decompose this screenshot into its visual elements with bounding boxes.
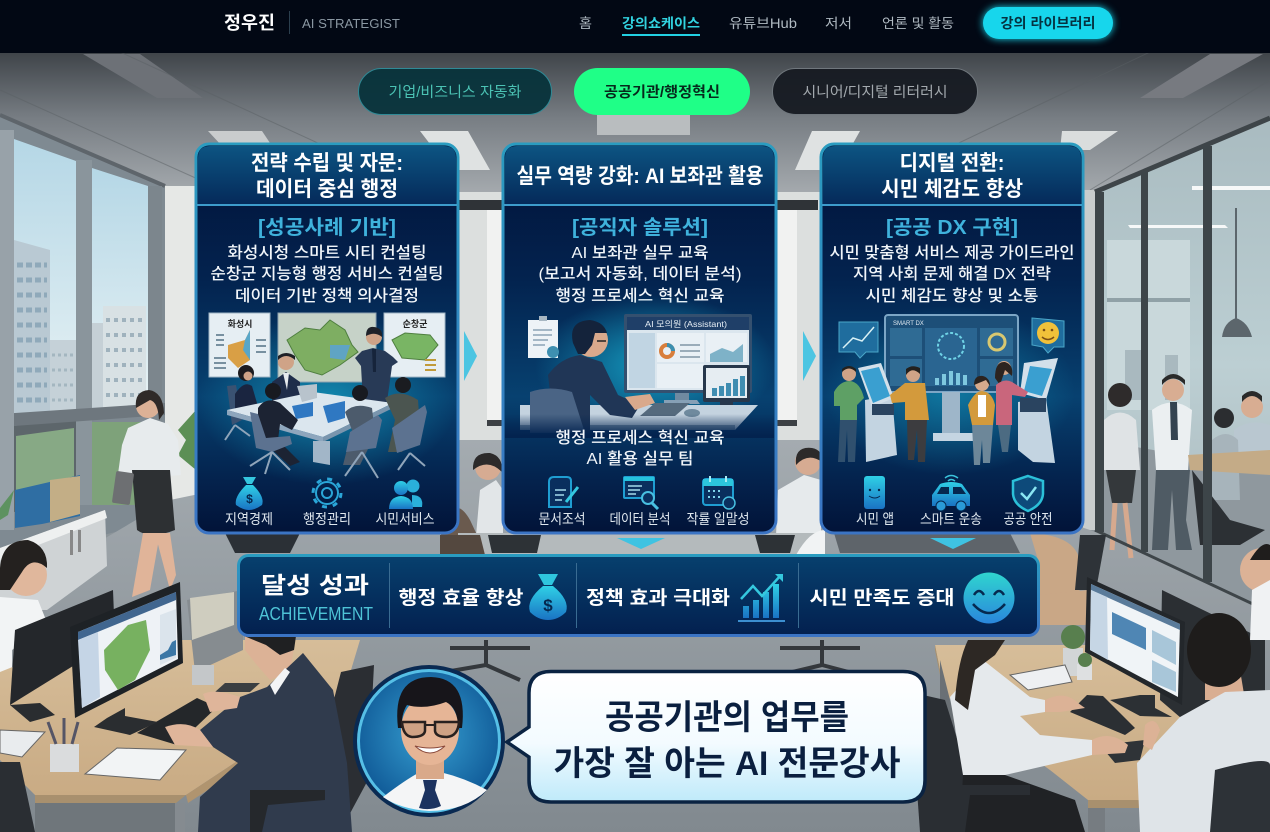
carpet floor [0,440,1270,832]
left desk [0,590,360,832]
lower caption: 행정 프로세스 혁신 교육 [556,429,724,447]
achievement: citizen satisfaction: 시민 만족도 증대 [810,587,954,609]
panel: digital transformation [821,144,1083,533]
speech bubble [507,672,925,802]
back seated people [227,353,300,425]
chair [530,388,585,433]
icon: money bag [236,477,263,510]
achievement bar [238,556,1038,636]
brand: AI STRATEGIST [302,16,400,31]
icon labels: 작률 일말성 [686,511,750,527]
icon: shield [1013,476,1043,511]
menu links: 홈 [579,16,592,31]
icon: calendar [703,476,735,509]
lower caption: AI 활용 실무 팀 [586,450,694,468]
right kiosk [1018,358,1058,463]
front seated people and chairs [225,377,427,478]
panel title: 디지털 전환: [900,152,1004,175]
panel title: 전략 수립 및 자문: [251,152,403,175]
panel bullet text: AI 보좌관 실무 교육 [572,244,708,262]
illustration: officer with AI assistant [505,295,775,436]
panel bullet text: 순창군 지능형 행정 서비스 컨설팅 [210,265,444,283]
ceiling [0,50,1270,200]
library button: 강의 라이브러리 [1000,15,1096,31]
connector arrows between panels [464,331,976,549]
achievement: efficiency: $ [543,596,553,615]
icon labels: 스마트 운송 [920,511,982,527]
back wall and projection screen [160,186,1100,530]
menu links: 언론 및 활동 [882,16,954,31]
panel bullet text [538,244,742,305]
documents [85,748,186,780]
panel bullet text: 행정 프로세스 혁신 교육 [556,287,724,305]
woman at right desk [912,640,1128,832]
right desk [935,625,1200,832]
icon: data search [624,477,658,509]
icon labels: 공공 안전 [1004,511,1052,527]
illustration: meeting room with maps [197,313,457,485]
keyboard [137,698,217,745]
icon labels: 데이터 분석 [610,511,670,527]
tab: business [358,68,552,114]
menu links: 유튜브Hub [729,16,797,31]
woman walking [112,390,181,597]
icon: citizen app [864,476,885,509]
filing cabinet [0,475,107,610]
speaker portrait [353,665,505,817]
brand: 정우진 [224,13,275,33]
achievement: policy impact: 정책 효과 극대화 [586,587,730,609]
panel bullet text [830,244,1074,305]
left kiosk [858,363,897,462]
panel bullet text: 화성시청 스마트 시티 컨설팅 [228,244,426,262]
plants [1063,648,1083,676]
tab: business: 기업/비즈니스 자동화 [388,84,522,101]
icon labels: 시민서비스 [376,511,435,527]
achievement: efficiency: 행정 효율 향상 [398,587,524,609]
smile bubble [1032,318,1064,353]
achievement: policy impact [586,574,785,622]
navigation bar [0,0,1270,53]
glasses [402,722,459,737]
menu links: 저서 [825,16,852,31]
panel bullet text [210,244,444,305]
menu links [579,16,954,36]
icon labels [538,511,750,527]
achievement heading: 달성 성과 [261,572,369,598]
panel subtitle: [공공 DX 구현] [886,216,1018,239]
panel: practical skills [503,144,776,533]
file holder [187,590,243,672]
panel title: 데이터 중심 행정 [256,178,398,201]
citizens [834,361,1028,465]
panel title: 실무 역량 강화: AI 보좌관 활용 [516,165,764,188]
keyboard and pad [1070,695,1135,735]
chair bottom-left [0,762,35,832]
standing presenter [355,327,398,402]
icon: money bag: $ [246,492,253,506]
brand [224,11,400,34]
clipboard [528,316,559,358]
menu links: 강의쇼케이스 [622,16,700,31]
left window with city view [0,115,165,560]
panel: strategy and consulting [196,144,458,533]
achievement: citizen satisfaction [810,572,1014,624]
people behind glass [1104,374,1270,558]
desk [520,405,758,430]
smile [415,746,445,753]
panel subtitle: [성공사례 기반] [258,216,396,239]
tab: senior [772,68,978,114]
man at right foreground [1137,544,1270,832]
dashboard screen [885,315,1018,392]
panel bullet text: (보고서 자동화, 데이터 분석) [538,265,742,283]
man in suit at left desk [165,636,374,832]
achievement heading: ACHIEVEMENT [259,604,373,624]
panel bullet text: 시민 체감도 향상 및 소통 [866,287,1038,305]
right glass partition [1095,118,1270,612]
keyboard and mouse [640,403,690,416]
achievement heading [259,572,373,624]
pen cup [192,665,214,685]
icon: smart car [932,476,970,511]
tab: public sector active [574,68,750,115]
main monitor [624,314,752,393]
icon: gear [313,479,341,507]
tab: public sector active: 공공기관/행정혁신 [604,84,720,101]
illustration: kiosks and dashboard [825,305,1075,475]
panel bullet text: 지역 사회 문제 해결 DX 전략 [853,265,1051,283]
icon labels [856,511,1052,527]
seated man at left [0,540,48,705]
icon labels: 지역경제 [225,511,273,527]
library button [983,7,1113,39]
officer [548,355,640,433]
achievement: efficiency [398,574,567,620]
small monitor [703,365,750,402]
panel subtitle: [공직자 솔루션] [572,216,708,239]
meeting table [227,384,393,465]
icon labels [225,511,435,527]
illustration: meeting room with maps: 화성시 [228,318,252,329]
icon: document [549,477,578,507]
panel bullet text: 데이터 기반 정책 의사결정 [235,287,419,305]
chair bases on the floor [445,640,860,680]
right monitors [1085,577,1265,760]
illustration: meeting room with maps: 순창군 [403,318,427,329]
speech bubble: 공공기관의 업무를 [605,699,849,737]
illustration: kiosks and dashboard: SMART DX [893,321,924,327]
seated figures behind panels [225,448,1106,625]
lower caption [505,429,774,468]
panel title [881,152,1023,201]
category tabs [358,68,978,115]
left monitors with map [10,582,183,735]
icon labels: 시민 앱 [856,511,894,527]
speech bubble: 가장 잘 아는 AI 전문강사 [554,745,900,783]
icon: users [389,480,422,509]
icon labels: 문서조석 [538,511,586,527]
chart bubble [839,322,878,358]
panel title: 시민 체감도 향상 [881,178,1023,201]
neck and face [416,755,444,779]
tab: senior: 시니어/디지털 리터러시 [802,84,948,101]
hair [397,677,463,728]
panel bullet text: 시민 맞춤형 서비스 제공 가이드라인 [830,244,1074,262]
shirt and tie [383,772,487,811]
illustration: officer with AI assistant: AI 모의원 (Assistant) [645,319,727,329]
city towers [14,240,146,419]
icon labels: 행정관리 [303,511,351,527]
plant behind panel [178,410,196,470]
panel title [251,152,403,201]
